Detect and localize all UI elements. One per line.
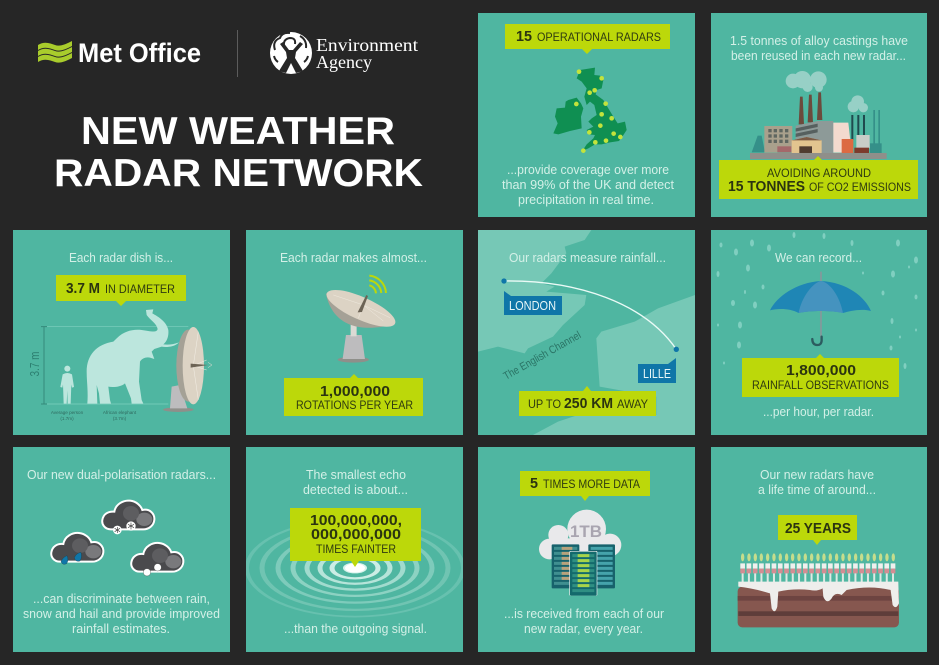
text: received [504,606,665,636]
panel: alloy castings reused [711,13,927,217]
label: London [504,291,562,315]
icon: snow cloud [102,501,154,534]
panel: smallest echo [246,447,463,652]
heading: life time [758,467,876,497]
panel: rainfall measuring range map [478,230,695,435]
callout: 5 times more data: 5 [530,476,538,492]
heading: life time: a life time of around... [758,482,876,497]
text: discriminate: ...can discriminate between rain, [33,591,210,606]
illustration: ripple rings [247,519,463,617]
labels: person and elephant [51,410,137,421]
text: per hour: ...per hour, per radar. [763,404,874,419]
labels: person and elephant: (1.7m) [60,416,74,421]
callout: 1,000,000 rotations: 1,000,000 [320,384,390,400]
icon: cloud and servers [539,510,621,596]
callout: 5 times more data: TIMES MORE DATA [543,477,640,491]
callout: times fainter: 100,000,000, [310,513,402,529]
text: alloy castings [730,33,908,63]
callout: times fainter: 000,000,000 [311,527,401,543]
text: coverage [502,162,674,207]
heading: smallest echo: detected is about... [303,482,408,497]
callout: 15 operational radars: 15 [516,29,532,45]
title: RADAR NETWORK [54,152,423,195]
callout: 1,000,000 rotations [284,374,423,416]
map: UK and Ireland with radar sites [553,68,627,153]
chart: size comparison of person, elephant and dish [27,309,212,421]
callout: avoiding 15 tonnes [719,156,918,199]
callout: 5 times more data [520,471,650,501]
labels: person and elephant: Average person [51,410,84,415]
text: discriminate: rainfall estimates. [72,621,170,636]
callout: 1,800,000 observations [742,354,899,397]
callout: up to 250 km [519,386,656,416]
panel: radar dish size [13,230,230,435]
label: Lille: LILLE [643,367,671,381]
callout: 3.7 m diameter: IN DIAMETER [105,282,175,296]
raindrops [716,232,918,369]
text: received: new radar, every year. [524,621,643,636]
callout: 3.7 m diameter [56,275,186,306]
callout: 3.7 m diameter: 3.7 M [66,281,100,297]
callout: 25 years: 25 YEARS [785,521,851,537]
text: coverage: precipitation in real time. [518,192,654,207]
header: logos and title [38,30,423,195]
callout: up to 250 km: AWAY [617,397,648,411]
cake layers [738,582,899,627]
callout: 1,000,000 rotations: ROTATIONS PER YEAR [296,398,413,412]
axis label: 3.7 m: 3.7 m [27,352,42,376]
callout: times fainter: TIMES FAINTER [316,542,396,556]
callout: 1,800,000 observations: 1,800,000 [786,363,856,379]
illustration: factory [750,71,887,159]
panel: life time [711,447,927,652]
text: coverage: ...provide coverage over more [507,162,669,177]
panel: more data [478,447,695,652]
candle row [740,553,896,578]
callout: avoiding 15 tonnes: AVOIDING AROUND [767,166,871,180]
text: discriminate: snow and hail and provide improved [23,606,220,621]
text: alloy castings: been reused in each new radar... [731,48,906,63]
callout: 15 operational radars [505,24,670,54]
labels: person and elephant: (3.7m) [113,416,127,421]
label: Lille [638,358,676,383]
callout: up to 250 km: UP TO [528,397,561,411]
panel: dual-polarisation [13,447,230,652]
heading: dual-polarisation: Our new dual-polarisation radars... [27,467,216,482]
heading: each radar makes: Each radar makes almost... [280,250,427,265]
text: coverage: than 99% of the UK and detect [502,177,674,192]
callout: 15 operational radars: OPERATIONAL RADARS [537,30,661,44]
icon: umbrella [770,272,871,345]
logo: Environment Agency [270,32,418,74]
heading: each radar dish: Each radar dish is... [69,250,173,265]
icons: rain, snow and hail clouds [51,501,183,576]
title: NEW WEATHER [81,110,395,153]
callout: 25 years [778,515,857,545]
callout: up to 250 km: 250 KM [564,396,613,412]
panel: rainfall observations [711,230,927,435]
callout: avoiding 15 tonnes: OF CO2 EMISSIONS [809,180,911,194]
label: 1TB: 1TB [570,522,602,541]
label: London: LONDON [509,299,556,313]
map: English Channel [478,230,695,435]
illustration: birthday cake [738,553,899,627]
panel: rotations per year [246,230,463,435]
callout: avoiding 15 tonnes: 15 TONNES [728,179,805,195]
logo: Met Office: Met Office [78,38,201,68]
heading: radars measure rainfall: Our radars measure rainfall... [509,250,666,265]
label: The English Channel: The English Channel [502,329,583,383]
text: discriminate [23,591,220,636]
heading: smallest echo: The smallest echo [306,467,406,482]
heading: we can record: We can record... [775,250,862,265]
logo: Environment Agency: Environment [316,35,418,55]
text: outgoing signal: ...than the outgoing signal. [284,621,427,636]
text: received: ...is received from each of our [504,606,665,621]
title [54,110,423,195]
labels: person and elephant: African elephant [103,410,137,415]
callout: 1,800,000 observations: RAINFALL OBSERVATIONS [752,378,889,392]
text: alloy castings: 1.5 tonnes of alloy castings have [730,33,908,48]
icon: hail cloud [131,543,183,576]
callout: times fainter [290,508,421,567]
heading: life time: Our new radars have [760,467,874,482]
logo: Environment Agency: Agency [316,52,372,72]
icon: rotating radar dish [322,276,400,363]
heading: smallest echo [303,467,408,497]
panel: 15 operational radars [478,13,695,217]
icon: rain cloud [51,533,103,564]
